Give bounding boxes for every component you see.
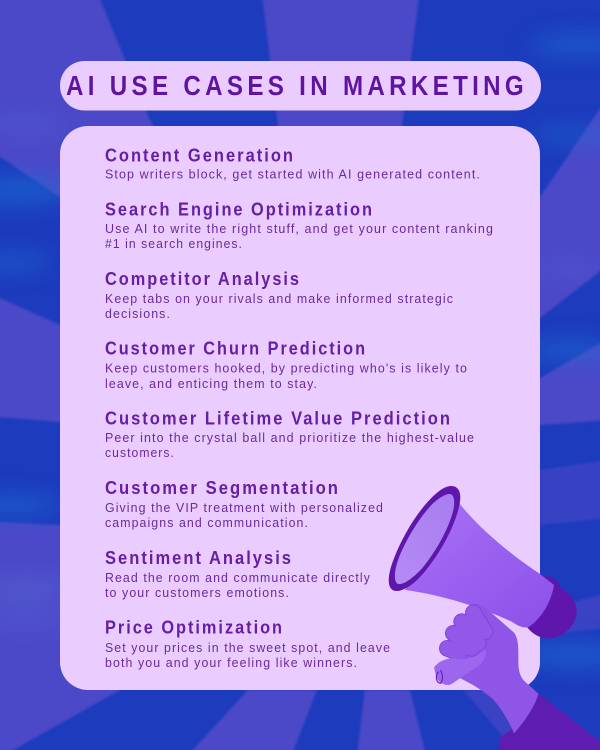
use case: customer segmentation: Giving the VIP treatment with personalized [105, 501, 384, 515]
use case: customer churn prediction [105, 338, 468, 391]
use case: customer lifetime value prediction: Customer Lifetime Value Prediction [105, 408, 452, 428]
use case: competitor analysis: Keep tabs on your rivals and make informed strategic [105, 292, 454, 306]
strap loop [436, 670, 442, 683]
sleeve [499, 693, 600, 750]
use case: competitor analysis: decisions. [105, 307, 171, 321]
use case: price optimization [105, 618, 391, 670]
megaphone cone [405, 503, 554, 627]
icon: megaphone held in hand [389, 486, 600, 750]
use case: content generation [105, 146, 481, 182]
use case: price optimization: Set your prices in the sweet spot, and leave [105, 641, 391, 655]
megaphone handle [434, 648, 486, 685]
use case: customer segmentation: Customer Segmentation [105, 478, 340, 498]
use case: competitor analysis [105, 269, 454, 321]
use case: content generation: Content Generation [105, 146, 295, 166]
megaphone back cap [527, 576, 577, 638]
use case: search engine optimization: Search Engine Optimization [105, 200, 374, 220]
title: AI USE CASES IN MARKETING [66, 70, 528, 101]
use case: search engine optimization: Use AI to write the right stuff, and get your content ranking [105, 222, 494, 236]
panel: use cases [60, 126, 540, 690]
use case: sentiment analysis: to your customers emotions. [105, 586, 290, 600]
finger shapes [447, 613, 485, 653]
use case: customer churn prediction: Keep customers hooked, by predicting who's is likely to [105, 362, 468, 376]
use case: customer lifetime value prediction [105, 408, 475, 460]
use case: customer lifetime value prediction: customers. [105, 446, 175, 460]
use case: search engine optimization [105, 200, 494, 251]
use case: customer segmentation [105, 478, 384, 530]
use case: content generation: Stop writers block, get started with AI generated content. [105, 168, 481, 182]
fingers [447, 613, 485, 653]
hand [450, 604, 538, 733]
title pill [60, 61, 541, 110]
use case: sentiment analysis [105, 548, 371, 600]
use case: sentiment analysis: Read the room and communicate directly [105, 571, 371, 585]
use case: customer segmentation: campaigns and communication. [105, 516, 309, 530]
use case: competitor analysis: Competitor Analysis [105, 269, 301, 289]
finger shadows [447, 613, 485, 653]
use case: sentiment analysis: Sentiment Analysis [105, 548, 293, 568]
use case: customer lifetime value prediction: Peer into the crystal ball and prioritize the highest-value [105, 431, 475, 445]
use case: search engine optimization: #1 in search engines. [105, 237, 243, 251]
megaphone opening [395, 494, 454, 584]
use case: customer churn prediction: Customer Churn Prediction [105, 338, 367, 358]
use case: price optimization: both you and your feeling like winners. [105, 656, 358, 670]
use case: price optimization: Price Optimization [105, 618, 284, 638]
use case: customer churn prediction: leave, and enticing them to stay. [105, 377, 318, 391]
megaphone rim [389, 486, 460, 591]
